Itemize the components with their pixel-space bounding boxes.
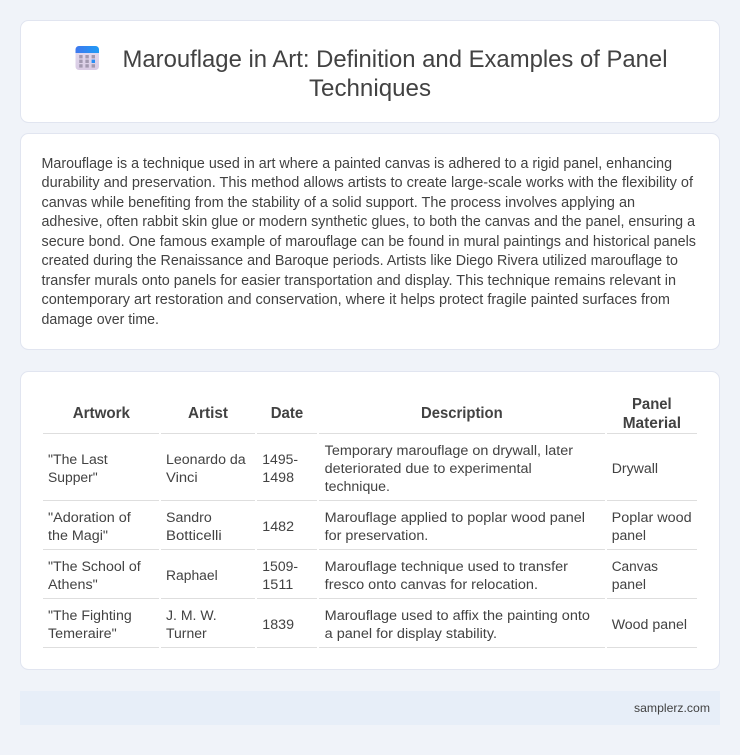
table row: The Last Supper: "The Last bbox=[48, 452, 108, 468]
table row: The Fighting Temeraire: 1839 bbox=[262, 617, 294, 633]
icon: calendar bbox=[76, 46, 99, 70]
table header row: Material bbox=[623, 415, 681, 432]
text block: definition paragraph: durability and preservation. This method allows artists to create large-scale works with the flexibility of bbox=[42, 175, 694, 191]
table header row bbox=[73, 396, 681, 432]
table row: The Fighting Temeraire: Turner bbox=[166, 626, 207, 642]
table row: The School of Athens: panel bbox=[612, 577, 646, 593]
text block: definition paragraph: transfer murals onto panels for easier transportation and display. This technique remains relevant in bbox=[42, 273, 676, 289]
text block: definition paragraph: created during the Renaissance and Baroque periods. Artists like Diego Rivera utilized marouflage to bbox=[42, 253, 678, 269]
table row: The School of Athens: Marouflage technique used to transfer bbox=[325, 559, 568, 575]
table header row: Date bbox=[271, 405, 304, 422]
table row: The Fighting Temeraire: Wood panel bbox=[612, 617, 687, 633]
table row: Adoration of the Magi: Poplar wood bbox=[612, 510, 692, 526]
table row: The School of Athens: Raphael bbox=[166, 568, 218, 584]
table row: Adoration of the Magi: for preservation. bbox=[325, 528, 428, 544]
table row: The Last Supper: technique. bbox=[325, 479, 390, 495]
footer bbox=[20, 691, 720, 725]
table row: The Fighting Temeraire: Marouflage used to affix the painting onto bbox=[325, 608, 590, 624]
panel: header bbox=[20, 20, 720, 122]
table row: The Fighting Temeraire: J. M. W. bbox=[166, 608, 217, 624]
text block: definition paragraph: damage over time. bbox=[42, 312, 159, 328]
table row: The Last Supper: Vinci bbox=[166, 470, 198, 486]
table row: The Last Supper bbox=[48, 443, 658, 495]
table row: The Last Supper: Leonardo da bbox=[166, 452, 246, 468]
table row: Adoration of the Magi bbox=[48, 510, 692, 544]
table row: The Last Supper: 1495- bbox=[262, 452, 298, 468]
table row: The Last Supper: Drywall bbox=[612, 461, 658, 477]
table row: The School of Athens: Athens" bbox=[48, 577, 98, 593]
table row: The Fighting Temeraire: a panel for display stability. bbox=[325, 626, 497, 642]
panel: intro text bbox=[20, 134, 720, 350]
table row: Adoration of the Magi: Botticelli bbox=[166, 528, 222, 544]
table header row: Artwork bbox=[73, 405, 130, 422]
table row: The School of Athens: "The School of bbox=[48, 559, 141, 575]
text block: definition paragraph: contemporary art restoration and conservation, where it helps protect fragile painted surfaces from bbox=[42, 292, 670, 308]
text block: definition paragraph: secure bond. One famous example of marouflage can be found in mural paintings and historical panels bbox=[42, 234, 696, 250]
table row: The Fighting Temeraire: Temeraire" bbox=[48, 626, 117, 642]
table row: Adoration of the Magi: Sandro bbox=[166, 510, 212, 526]
table row: Adoration of the Magi: 1482 bbox=[262, 519, 294, 535]
table row: The School of Athens bbox=[48, 559, 658, 593]
table row: The Last Supper: 1498 bbox=[262, 470, 294, 486]
table header row: Artist bbox=[188, 405, 228, 422]
text block: definition paragraph: Marouflage is a technique used in art where a painted canvas is adhered to a rigid panel, enhancing bbox=[42, 156, 672, 172]
footer: samplerz.com bbox=[634, 701, 710, 715]
table row: The School of Athens: fresco onto canvas for relocation. bbox=[325, 577, 538, 593]
text block: definition paragraph bbox=[42, 156, 696, 328]
table row: The School of Athens: Canvas bbox=[612, 559, 658, 575]
table row: Adoration of the Magi: panel bbox=[612, 528, 646, 544]
table row: Adoration of the Magi: "Adoration of bbox=[48, 510, 131, 526]
table row: The Last Supper: Temporary marouflage on drywall, later bbox=[325, 443, 573, 459]
title bbox=[122, 46, 668, 102]
table header row: Description bbox=[421, 405, 503, 422]
text block: definition paragraph: canvas while benefiting from the stability of a solid support. The process involves applying an bbox=[42, 195, 635, 211]
table row: The Fighting Temeraire bbox=[48, 608, 687, 642]
table row: Adoration of the Magi: the Magi" bbox=[48, 528, 108, 544]
table row: Adoration of the Magi: Marouflage applied to poplar wood panel bbox=[325, 510, 585, 526]
table row: The Last Supper: deteriorated due to experimental bbox=[325, 461, 532, 477]
table row: The School of Athens: 1511 bbox=[262, 577, 293, 593]
title: Techniques bbox=[309, 75, 431, 102]
table header row: Panel bbox=[632, 396, 672, 413]
table row: The Fighting Temeraire: "The Fighting bbox=[48, 608, 132, 624]
text block: definition paragraph: adhesive, often rabbit skin glue or modern synthetic glues, to both the canvas and the panel, ensuring a bbox=[42, 214, 696, 230]
table rules bbox=[43, 433, 697, 648]
table row: The School of Athens: 1509- bbox=[262, 559, 298, 575]
table row: The Last Supper: Supper" bbox=[48, 470, 98, 486]
title: Marouflage in Art: Definition and Examples of Panel bbox=[122, 46, 668, 73]
panel: artworks table bbox=[20, 372, 720, 670]
